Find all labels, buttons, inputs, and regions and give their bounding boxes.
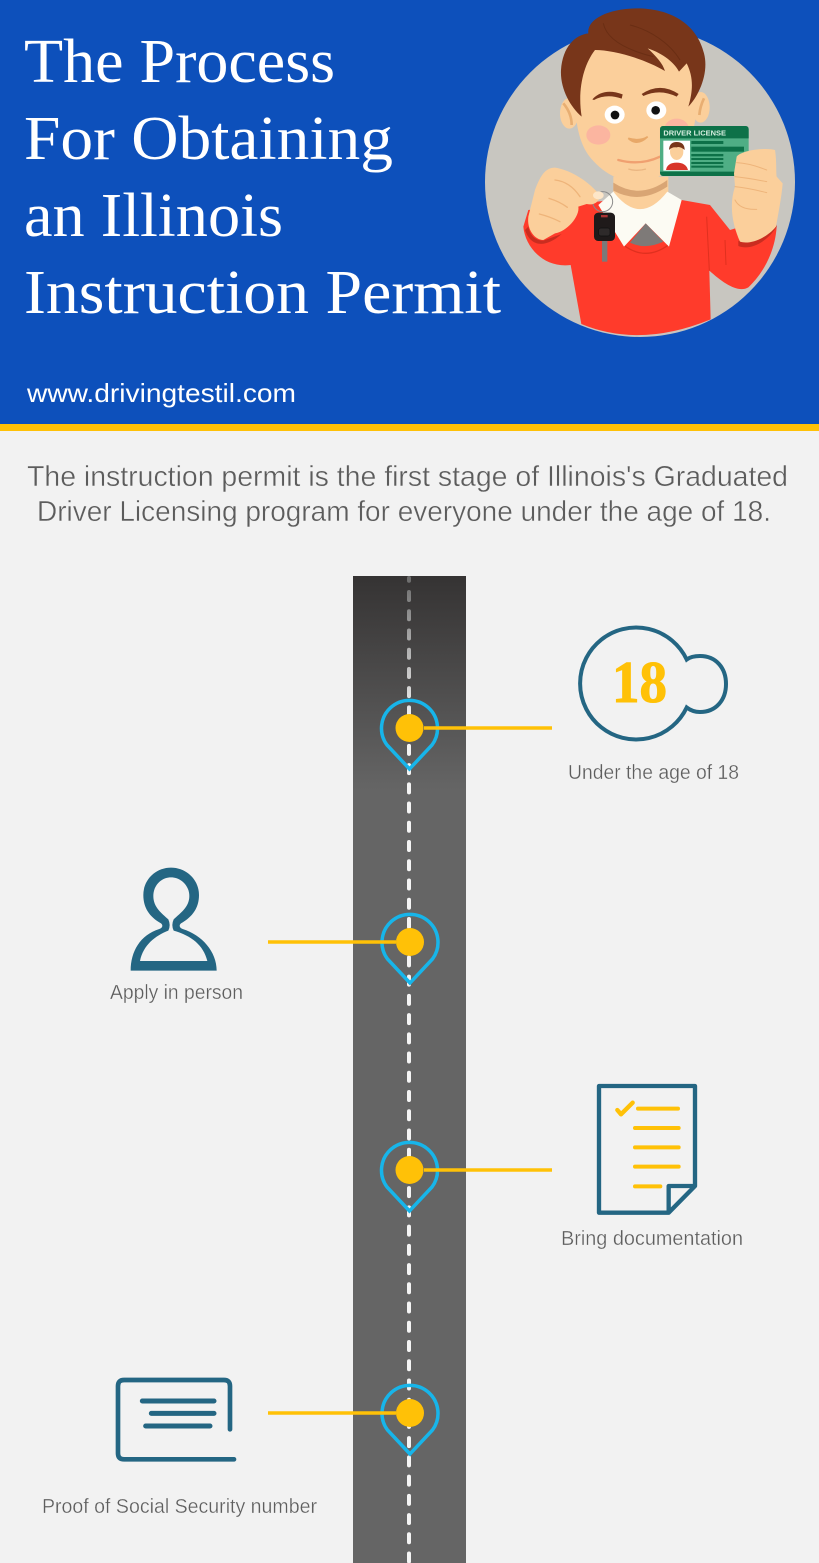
step 1 marker: [382, 700, 552, 769]
left hand: [528, 168, 599, 240]
face: [575, 40, 696, 183]
key: [593, 192, 613, 212]
title: an Illinois: [24, 182, 283, 250]
hair: [561, 8, 705, 117]
intro text: Driver Licensing program for everyone under the age of 18.: [37, 496, 771, 528]
eyes: [605, 106, 625, 124]
step 4 icon: social security card: [118, 1380, 234, 1459]
brows: [592, 92, 623, 100]
header banner: [0, 0, 819, 431]
step 4 label: Proof of Social Security number: [42, 1496, 317, 1518]
title: Instruction Permit: [24, 259, 501, 327]
step 2 marker: [268, 914, 438, 983]
right hand: [732, 149, 783, 243]
cheeks, nose, mouth: [586, 125, 610, 145]
road: [353, 576, 466, 1563]
intro text: The instruction permit is the first stage of Illinois's Graduated: [27, 461, 788, 493]
title: For Obtaining: [24, 105, 393, 173]
neck: [613, 177, 668, 210]
title: The Process: [24, 28, 335, 96]
title: [24, 28, 501, 327]
ears: [560, 98, 579, 129]
license card: [660, 126, 749, 176]
step 1 icon: age 18 bubble: 18: [612, 649, 667, 715]
step 2 label: Apply in person: [110, 982, 243, 1004]
step 3 label: Bring documentation: [561, 1228, 743, 1250]
illustration: boy holding key and driver license: [485, 8, 795, 337]
illustration: boy holding key and driver license: DRIVER LICENSE: [663, 129, 726, 138]
step 3 marker: [382, 1142, 552, 1211]
website url: www.drivingtestil.com: [26, 378, 296, 408]
step 1 icon: age 18 bubble: [580, 628, 726, 740]
intro text: [27, 461, 788, 528]
step 3 icon: document checklist: [599, 1086, 695, 1213]
sweater: [523, 200, 777, 335]
step 1 label: Under the age of 18: [568, 762, 739, 784]
step 4 marker: [268, 1385, 438, 1454]
step 2 icon: person: [131, 868, 217, 971]
collar: [598, 192, 682, 247]
